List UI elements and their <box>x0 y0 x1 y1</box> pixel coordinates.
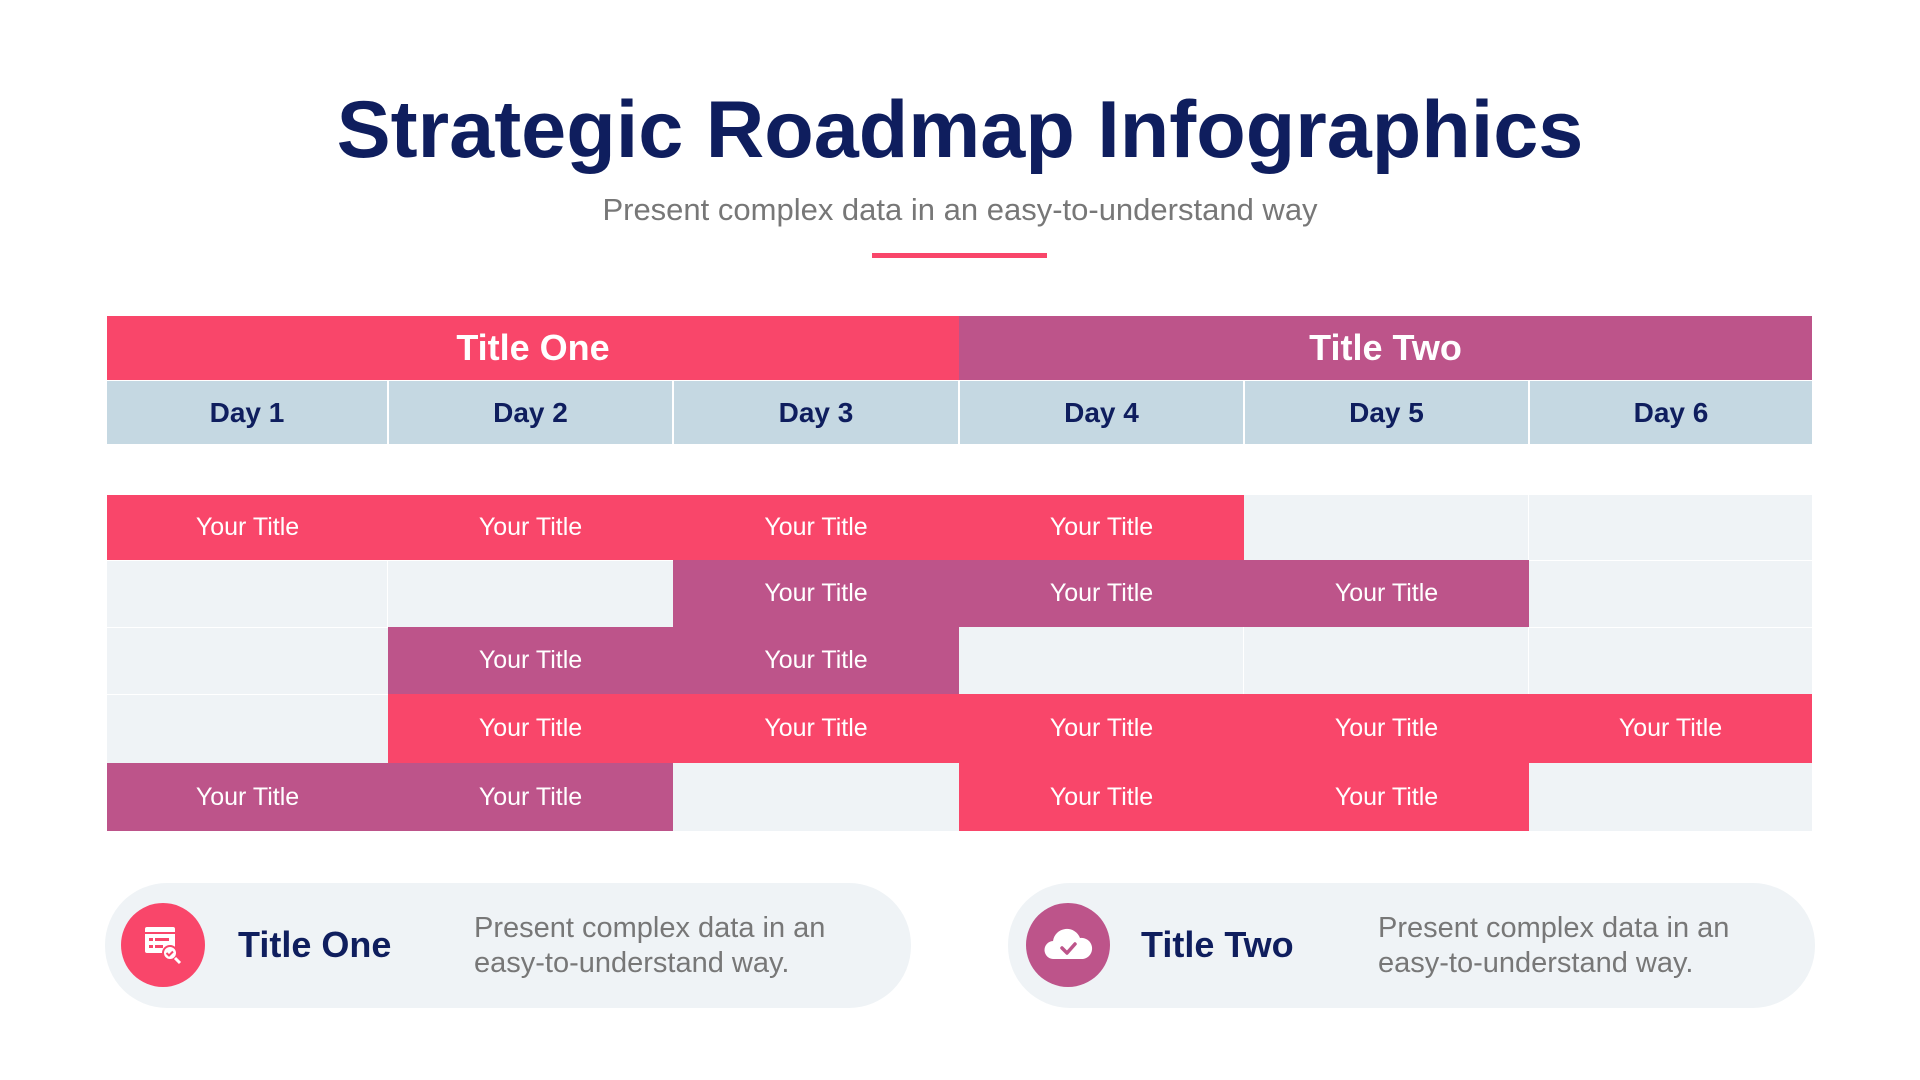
day headers: Day 6 <box>1634 396 1708 428</box>
gantt rows: Your Title <box>1335 579 1438 607</box>
gantt rows: Your Title <box>479 513 582 541</box>
gantt rows: Your Title <box>1335 782 1438 810</box>
row 5 <box>107 763 388 831</box>
day headers: Day 2 <box>493 396 568 428</box>
subtitle: Present complex data in an easy-to-understand way <box>602 192 1318 227</box>
legend heading: Title Two <box>1141 924 1294 965</box>
gantt rows: Your Title <box>479 714 582 742</box>
day headers: Day 5 <box>1349 396 1424 428</box>
gantt rows: Your Title <box>479 646 582 674</box>
gantt rows: Your Title <box>1619 714 1722 742</box>
legend heading: Title One <box>238 924 391 965</box>
gantt rows: Your Title <box>764 513 868 541</box>
row 2 <box>107 560 388 627</box>
icon: cloud check <box>1026 903 1110 987</box>
day headers: Day 3 <box>779 396 853 428</box>
legend text: Present complex data in an <box>1378 912 1729 944</box>
gantt rows: Your Title <box>1050 513 1153 541</box>
legend text: easy-to-understand way. <box>474 947 789 979</box>
table <box>107 316 1812 831</box>
legend text <box>474 912 825 979</box>
row 5: Your Title <box>196 782 299 810</box>
gantt rows: Your Title <box>1335 714 1438 742</box>
accent line <box>872 253 1047 258</box>
row 1 <box>107 495 388 560</box>
gantt rows: Your Title <box>764 646 868 674</box>
row 4 <box>107 694 388 763</box>
header: Title One <box>107 316 959 380</box>
icon: checklist search <box>121 903 205 987</box>
header: Title Two: Title Two <box>1309 327 1462 368</box>
gantt rows: Your Title <box>1050 579 1153 607</box>
header: Title One: Title One <box>456 327 610 368</box>
legend text <box>1378 912 1729 979</box>
gantt rows <box>107 495 1812 831</box>
row 3 <box>107 627 388 694</box>
panel: Title One legend <box>105 883 911 1008</box>
day headers: Day 4 <box>1064 396 1139 428</box>
day headers <box>107 381 1812 444</box>
row 1: Your Title <box>196 513 299 541</box>
title: Strategic Roadmap Infographics <box>337 85 1583 175</box>
gantt rows: Your Title <box>1050 714 1153 742</box>
gantt rows: Your Title <box>479 782 582 810</box>
legend text: easy-to-understand way. <box>1378 947 1693 979</box>
panel: Title Two legend <box>1008 883 1815 1008</box>
gantt rows: Your Title <box>1050 782 1153 810</box>
header: Title Two <box>959 316 1812 380</box>
day headers: Day 1 <box>210 396 284 428</box>
legend text: Present complex data in an <box>474 912 825 944</box>
gantt rows: Your Title <box>764 714 868 742</box>
gantt rows: Your Title <box>764 579 868 607</box>
